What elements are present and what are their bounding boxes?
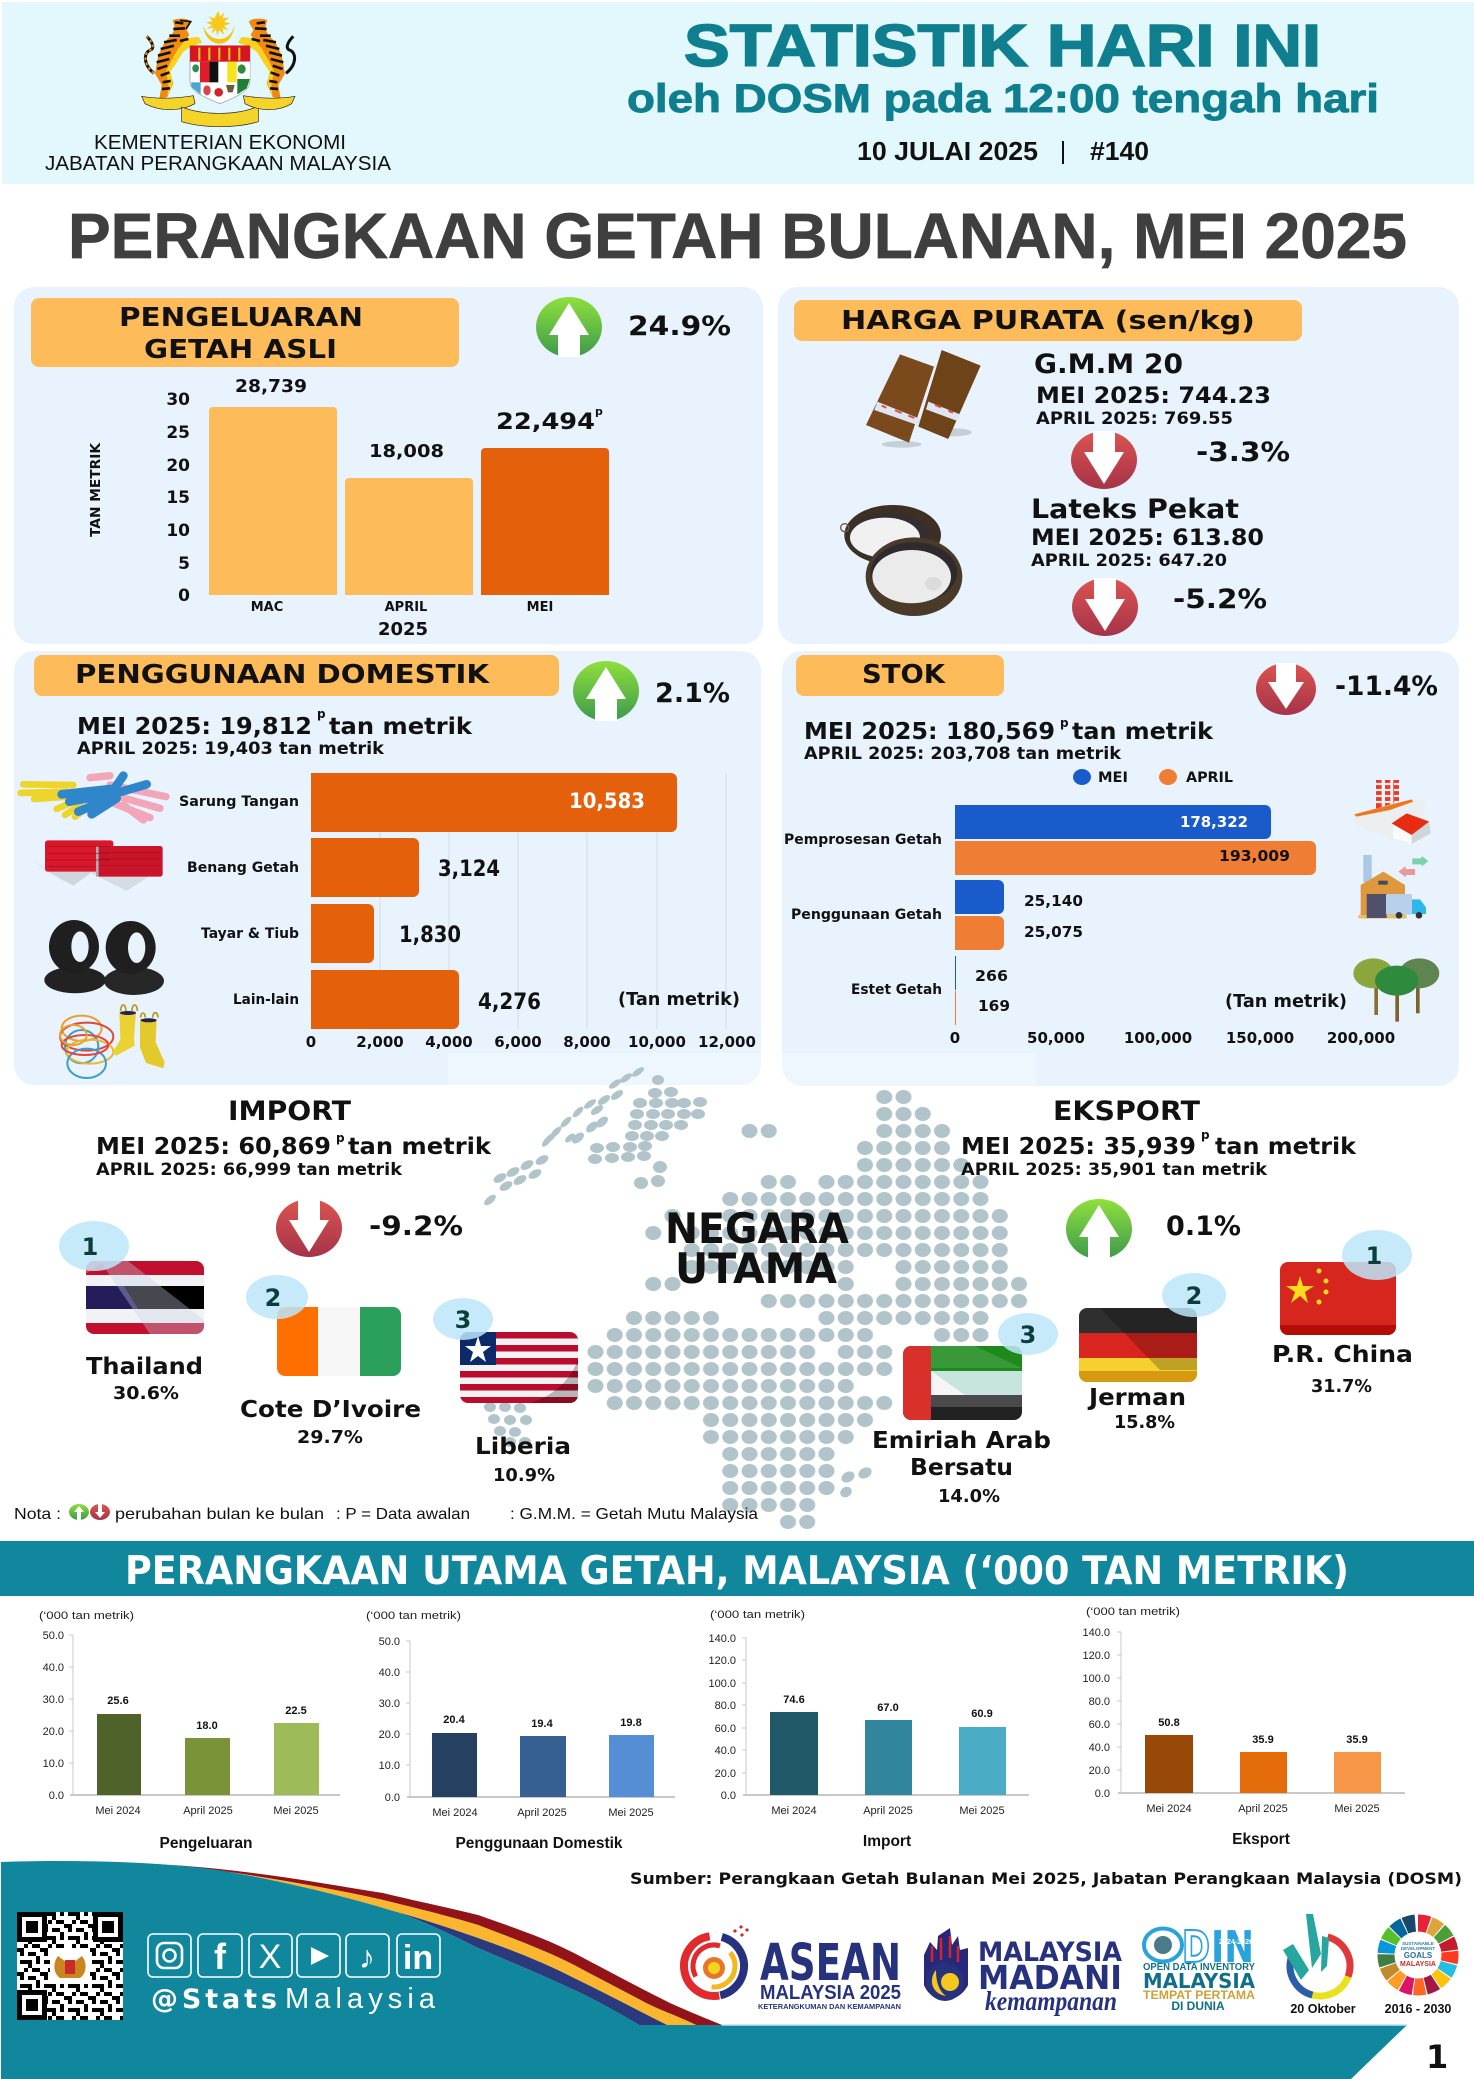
logo: 20 oktober: 20 Oktober bbox=[1290, 2002, 1356, 2016]
chart: import: 67.0 bbox=[877, 1702, 899, 1714]
bar chart: 20 bbox=[166, 456, 190, 476]
bar chart: 28,739 bbox=[235, 376, 307, 397]
chart: pengeluaran: 10.0 bbox=[43, 1758, 64, 1770]
import country: liberia: 10.9% bbox=[493, 1465, 555, 1486]
sdg wheel caption: SUSTAINABLE bbox=[1402, 1941, 1434, 1946]
bar chart: TAN METRIK bbox=[89, 442, 104, 537]
eksport country: jerman: Jerman bbox=[1087, 1385, 1186, 1411]
bar chart bbox=[89, 376, 609, 640]
logo: asean malaysia 2025: KETERANGKUMAN DAN KEMAMPANAN bbox=[758, 2002, 901, 2011]
horizontal bar chart: 2,000 bbox=[356, 1033, 404, 1051]
eksport country: china: 31.7% bbox=[1311, 1376, 1372, 1397]
chart: import: 140.0 bbox=[708, 1633, 736, 1645]
stock figures bbox=[804, 716, 1214, 764]
import country: liberia: Liberia bbox=[475, 1434, 571, 1460]
social icons bbox=[148, 1934, 440, 1977]
panel: stok bbox=[782, 651, 1459, 1086]
logo: open data inventory bbox=[1143, 1922, 1256, 2013]
horizontal bar chart: Tayar & Tiub bbox=[201, 926, 299, 942]
lateks pekat bbox=[1031, 494, 1264, 571]
horizontal bar chart: Sarung Tangan bbox=[179, 794, 299, 810]
chart: import: Import bbox=[863, 1833, 911, 1850]
horizontal bar chart: 10,000 bbox=[628, 1033, 686, 1051]
change value: 24.9% bbox=[628, 311, 731, 342]
chart: import: 80.0 bbox=[715, 1700, 736, 1712]
horizontal bar chart: 12,000 bbox=[698, 1033, 756, 1051]
chart: penggunaan domestik: April 2025 bbox=[517, 1807, 567, 1819]
chart: eksport: (‘000 tan metrik) bbox=[1086, 1606, 1180, 1618]
horizontal bar chart: 10,583 bbox=[569, 789, 645, 813]
bar chart: p bbox=[595, 405, 603, 418]
sdg wheel caption: DEVELOPMENT bbox=[1401, 1946, 1435, 1951]
horizontal bar chart: 3,124 bbox=[438, 857, 500, 882]
usage figures: APRIL 2025: 19,403 tan metrik bbox=[77, 739, 385, 759]
change value: -3.3% bbox=[1196, 437, 1290, 468]
chart: penggunaan domestik: 30.0 bbox=[379, 1698, 400, 1710]
change value: -11.4% bbox=[1335, 671, 1438, 702]
negara utama label: UTAMA bbox=[675, 1244, 837, 1293]
negara utama label: NEGARA bbox=[665, 1204, 849, 1253]
lateks pekat: MEI 2025: 613.80 bbox=[1031, 526, 1264, 551]
icon: up arrow bbox=[536, 297, 602, 357]
chart: eksport bbox=[1082, 1606, 1405, 1848]
eksport country: jerman: 15.8% bbox=[1114, 1412, 1175, 1433]
bar chart: 18,008 bbox=[369, 441, 444, 462]
chart: pengeluaran: 20.0 bbox=[43, 1726, 64, 1738]
eksport figures bbox=[961, 1128, 1357, 1180]
chart: pengeluaran: 0.0 bbox=[49, 1790, 64, 1802]
grouped bar chart: 50,000 bbox=[1027, 1029, 1085, 1047]
chart: import: 20.0 bbox=[715, 1768, 736, 1780]
bar chart: 30 bbox=[166, 390, 190, 410]
negara utama label bbox=[665, 1204, 849, 1293]
chart: import bbox=[708, 1609, 1029, 1850]
chart: pengeluaran: 22.5 bbox=[285, 1705, 307, 1717]
logo: asean malaysia 2025 bbox=[677, 1926, 901, 2011]
note line: : G.M.M. = Getah Mutu Malaysia bbox=[510, 1506, 758, 1523]
grouped bar chart: 193,009 bbox=[1219, 847, 1290, 865]
chart: penggunaan domestik: 40.0 bbox=[379, 1667, 400, 1679]
chart: eksport: 100.0 bbox=[1082, 1673, 1110, 1685]
icon: rubber sheets and latex bowls bbox=[841, 350, 981, 616]
chart: pengeluaran: 40.0 bbox=[43, 1662, 64, 1674]
chart: import: 60.0 bbox=[715, 1723, 736, 1735]
chart: eksport: Eksport bbox=[1232, 1831, 1290, 1848]
chart: import: 60.9 bbox=[971, 1708, 993, 1720]
bar chart: 22,494 bbox=[496, 410, 595, 435]
horizontal bar chart: 4,000 bbox=[425, 1033, 473, 1051]
grouped bar chart: Penggunaan Getah bbox=[791, 907, 942, 923]
eksport country: china: 1 bbox=[1366, 1242, 1382, 1270]
chart: penggunaan domestik: 20.0 bbox=[379, 1729, 400, 1741]
grouped bar chart: Pemprosesan Getah bbox=[784, 832, 942, 848]
chart: pengeluaran: Pengeluaran bbox=[159, 1835, 253, 1852]
icon: x: X bbox=[259, 1938, 281, 1976]
logo: malaysia madani bbox=[924, 1928, 1122, 2016]
eksport country: emiriah arab bersatu: Bersatu bbox=[910, 1455, 1013, 1481]
sdg wheel caption: MALAYSIA bbox=[1400, 1961, 1436, 1968]
chart: import: Mei 2025 bbox=[959, 1805, 1005, 1817]
eksport figures: MEI 2025: 35,939 bbox=[961, 1134, 1196, 1160]
heading: PENGELUARAN bbox=[119, 303, 363, 333]
chart: import: Mei 2024 bbox=[771, 1805, 817, 1817]
horizontal bar chart: (Tan metrik) bbox=[618, 989, 740, 1010]
ministry name: JABATAN PERANGKAAN MALAYSIA bbox=[45, 153, 392, 175]
import change: -9.2% bbox=[369, 1211, 463, 1242]
eksport figures: tan metrik bbox=[1215, 1134, 1357, 1160]
import country: cote d'ivoire: 29.7% bbox=[297, 1427, 363, 1448]
logo: open data inventory: 2024-2026 bbox=[1219, 1939, 1253, 1946]
lateks pekat: APRIL 2025: 647.20 bbox=[1031, 551, 1227, 571]
import country: liberia bbox=[433, 1298, 578, 1486]
icon: tiktok: ♪ bbox=[359, 1939, 375, 1975]
heading: HARGA PURATA (sen/kg) bbox=[841, 306, 1255, 336]
panel: penggunaan domestik bbox=[14, 651, 761, 1085]
import figures: MEI 2025: 60,869 bbox=[96, 1134, 331, 1160]
horizontal bar chart: 1,830 bbox=[399, 923, 461, 948]
chart: penggunaan domestik: Mei 2025 bbox=[608, 1807, 654, 1819]
date and issue bbox=[857, 136, 1149, 166]
chart: penggunaan domestik: 19.8 bbox=[620, 1717, 642, 1729]
eksport country: emiriah arab bersatu: Emiriah Arab bbox=[872, 1428, 1051, 1454]
panel: pengeluaran getah asli bbox=[14, 287, 763, 644]
chart: pengeluaran: April 2025 bbox=[183, 1805, 233, 1817]
logo: malaysia madani: MALAYSIA bbox=[978, 1937, 1122, 1968]
import figures: APRIL 2025: 66,999 tan metrik bbox=[96, 1160, 403, 1180]
horizontal bar chart: 6,000 bbox=[494, 1033, 542, 1051]
bar chart: APRIL bbox=[385, 600, 427, 615]
chart: pengeluaran: (‘000 tan metrik) bbox=[39, 1610, 134, 1622]
logo: open data inventory: DI DUNIA bbox=[1171, 1999, 1225, 2013]
horizontal bar chart: 8,000 bbox=[563, 1033, 611, 1051]
logo: open data inventory: MALAYSIA bbox=[1143, 1969, 1256, 1993]
heading bbox=[796, 655, 1004, 696]
grouped bar chart: 25,075 bbox=[1024, 923, 1083, 941]
bar chart: MAC bbox=[251, 600, 283, 615]
chart: penggunaan domestik: 0.0 bbox=[385, 1792, 400, 1804]
logo: malaysia madani: kemampanan bbox=[985, 1986, 1117, 2016]
import figures: p bbox=[336, 1131, 345, 1145]
section banner: PERANGKAAN UTAMA GETAH, MALAYSIA (‘000 TAN METRIK) bbox=[125, 1549, 1349, 1594]
usage figures: MEI 2025: 19,812 bbox=[77, 714, 312, 740]
usage figures bbox=[77, 707, 473, 759]
date and issue: 10 JULAI 2025 bbox=[857, 136, 1038, 166]
chart: eksport: 20.0 bbox=[1089, 1765, 1110, 1777]
handle: @Stats bbox=[151, 1984, 277, 2015]
import country: cote d'ivoire: 2 bbox=[265, 1284, 281, 1312]
chart: penggunaan domestik bbox=[366, 1610, 675, 1852]
chart: penggunaan domestik: Penggunaan Domestik bbox=[455, 1835, 623, 1852]
horizontal bar chart: Benang Getah bbox=[187, 860, 299, 876]
chart: import: April 2025 bbox=[863, 1805, 913, 1817]
icon: gloves, thread spools, tyres, rubber bands and boots bbox=[21, 776, 166, 1078]
grouped bar chart: 150,000 bbox=[1226, 1029, 1294, 1047]
horizontal bar chart bbox=[179, 773, 756, 1051]
icon: down arrow bbox=[1072, 578, 1138, 636]
icon: linkedin: in bbox=[403, 1939, 433, 1977]
sdg wheel caption bbox=[1385, 1941, 1451, 2016]
logo: open data inventory: TEMPAT PERTAMA bbox=[1143, 1988, 1255, 2002]
import figures: tan metrik bbox=[348, 1134, 492, 1160]
bar chart: MEI bbox=[527, 600, 553, 615]
chart: import: 100.0 bbox=[708, 1678, 736, 1690]
chart: import: (‘000 tan metrik) bbox=[710, 1609, 805, 1621]
brand title: STATISTIK HARI INI bbox=[684, 13, 1321, 79]
grouped bar chart: Estet Getah bbox=[851, 982, 942, 998]
chart: eksport: Mei 2024 bbox=[1146, 1803, 1192, 1815]
grouped bar chart: 178,322 bbox=[1180, 813, 1248, 831]
icon: instagram bbox=[157, 1943, 182, 1968]
legend: MEI bbox=[1098, 770, 1128, 786]
chart: eksport: 40.0 bbox=[1089, 1742, 1110, 1754]
note line: : P = Data awalan bbox=[336, 1506, 470, 1523]
eksport figures: p bbox=[1201, 1128, 1210, 1142]
page number: 1 bbox=[1426, 2038, 1448, 2076]
legend: APRIL bbox=[1186, 770, 1233, 786]
icon: facebook: f bbox=[214, 1936, 227, 1977]
stock figures: tan metrik bbox=[1072, 719, 1214, 745]
grouped bar chart: (Tan metrik) bbox=[1225, 991, 1347, 1012]
chart: import: 0.0 bbox=[721, 1790, 736, 1802]
stock figures: p bbox=[1060, 716, 1069, 730]
grouped bar chart: 200,000 bbox=[1327, 1029, 1395, 1047]
chart: import: 74.6 bbox=[783, 1694, 805, 1706]
chart: eksport: April 2025 bbox=[1238, 1803, 1288, 1815]
GMM 20: APRIL 2025: 769.55 bbox=[1036, 409, 1233, 429]
icon: coat of arms bbox=[142, 11, 295, 127]
logo: open data inventory: D bbox=[1182, 1922, 1210, 1973]
logo: asean malaysia 2025: MALAYSIA 2025 bbox=[760, 1982, 901, 2004]
grouped bar chart: 25,140 bbox=[1024, 892, 1083, 910]
icon: dotted world map bbox=[448, 1053, 1036, 1530]
heading bbox=[794, 300, 1302, 341]
chart: penggunaan domestik: 19.4 bbox=[531, 1718, 554, 1730]
grouped bar chart: 0 bbox=[950, 1029, 960, 1047]
header band bbox=[2, 2, 1474, 184]
chart: eksport: 50.8 bbox=[1158, 1717, 1180, 1729]
horizontal bar chart: 4,276 bbox=[478, 990, 541, 1015]
icon: import down arrow bbox=[276, 1199, 342, 1257]
chart: eksport: 0.0 bbox=[1095, 1788, 1110, 1800]
grouped bar chart bbox=[784, 805, 1395, 1047]
chart: eksport: 140.0 bbox=[1082, 1627, 1110, 1639]
logo: open data inventory: OPEN DATA INVENTORY bbox=[1143, 1961, 1255, 1973]
import heading: IMPORT bbox=[228, 1096, 352, 1127]
lateks pekat: Lateks Pekat bbox=[1031, 494, 1239, 525]
stock figures: APRIL 2025: 203,708 tan metrik bbox=[804, 744, 1122, 764]
icon: down arrow bbox=[1071, 431, 1137, 489]
chart: pengeluaran: 18.0 bbox=[196, 1720, 218, 1732]
panel: harga purata bbox=[778, 287, 1459, 644]
eksport country: emiriah arab bersatu: 3 bbox=[1020, 1321, 1036, 1349]
chart: eksport: 60.0 bbox=[1089, 1719, 1110, 1731]
chart: pengeluaran: 30.0 bbox=[43, 1694, 64, 1706]
chart: penggunaan domestik: 20.4 bbox=[443, 1714, 466, 1726]
heading: GETAH ASLI bbox=[144, 335, 337, 365]
import country: thailand: 1 bbox=[82, 1233, 98, 1261]
ministry name: KEMENTERIAN EKONOMI bbox=[94, 132, 346, 154]
source line: Sumber: Perangkaan Getah Bulanan Mei 2025, Jabatan Perangkaan Malaysia (DOSM) bbox=[630, 1869, 1462, 1888]
horizontal bar chart: Lain-lain bbox=[233, 992, 299, 1008]
heading bbox=[34, 655, 559, 696]
icon: play bbox=[311, 1947, 329, 1965]
GMM 20: G.M.M 20 bbox=[1034, 349, 1183, 380]
brand title: oleh DOSM pada 12:00 tengah hari bbox=[627, 77, 1379, 121]
chart: eksport: 80.0 bbox=[1089, 1696, 1110, 1708]
sdg wheel caption: 2016 - 2030 bbox=[1385, 2002, 1451, 2016]
note line: Nota : bbox=[14, 1506, 61, 1523]
date and issue: #140 bbox=[1090, 136, 1149, 166]
eksport country: emiriah arab bersatu bbox=[872, 1313, 1058, 1507]
chart: import: 120.0 bbox=[708, 1655, 736, 1667]
bar chart: 5 bbox=[178, 554, 190, 574]
change value: 2.1% bbox=[655, 678, 730, 709]
eksport country: china: P.R. China bbox=[1272, 1342, 1413, 1368]
chart: eksport: 120.0 bbox=[1082, 1650, 1110, 1662]
note line: perubahan bulan ke bulan bbox=[115, 1506, 324, 1523]
chart: eksport: 35.9 bbox=[1252, 1734, 1274, 1746]
chart: pengeluaran: 25.6 bbox=[107, 1695, 129, 1707]
chart: penggunaan domestik: Mei 2024 bbox=[432, 1807, 478, 1819]
chart: pengeluaran: Mei 2025 bbox=[273, 1805, 319, 1817]
logo: asean malaysia 2025: ASEAN bbox=[760, 1934, 901, 1993]
icon: down arrow bbox=[1256, 663, 1316, 715]
icon: QR code bbox=[17, 1912, 123, 2020]
usage figures: tan metrik bbox=[329, 714, 473, 740]
bar chart: 10 bbox=[166, 521, 190, 541]
handle bbox=[151, 1983, 436, 2015]
heading: STOK bbox=[862, 660, 946, 690]
GMM 20: MEI 2025: 744.23 bbox=[1036, 384, 1271, 409]
heading bbox=[31, 298, 459, 367]
grouped bar chart: 169 bbox=[978, 997, 1010, 1015]
eksport heading: EKSPORT bbox=[1053, 1096, 1201, 1127]
usage figures: p bbox=[317, 707, 326, 721]
footer band bbox=[1, 1861, 1407, 2079]
logo: open data inventory: IN bbox=[1211, 1922, 1254, 1973]
icon: eksport up arrow bbox=[1066, 1199, 1132, 1259]
logo: sustainable development goals wheel bbox=[1373, 1910, 1463, 2000]
chart: import: 40.0 bbox=[715, 1745, 736, 1757]
import country: liberia: 3 bbox=[455, 1306, 471, 1334]
chart: pengeluaran: 50.0 bbox=[43, 1630, 64, 1642]
note line bbox=[14, 1504, 758, 1523]
chart: pengeluaran bbox=[39, 1610, 340, 1852]
horizontal bar chart: 0 bbox=[306, 1033, 316, 1051]
change value: -5.2% bbox=[1173, 584, 1267, 615]
import country: thailand: 30.6% bbox=[113, 1383, 179, 1404]
ministry name bbox=[45, 132, 392, 175]
bar chart: 15 bbox=[166, 488, 190, 508]
chart: penggunaan domestik: 50.0 bbox=[379, 1636, 400, 1648]
brand title bbox=[627, 13, 1379, 121]
handle: Malaysia bbox=[285, 1983, 436, 2015]
bar chart: 0 bbox=[178, 586, 190, 606]
main title: PERANGKAAN GETAH BULANAN, MEI 2025 bbox=[68, 200, 1407, 272]
import country: cote d'ivoire bbox=[240, 1275, 421, 1448]
bar chart: 25 bbox=[166, 423, 190, 443]
grouped bar chart: 266 bbox=[975, 967, 1008, 985]
stock figures: MEI 2025: 180,569 bbox=[804, 719, 1055, 745]
import country: thailand bbox=[59, 1221, 204, 1404]
heading: PENGGUNAAN DOMESTIK bbox=[75, 660, 490, 690]
legend bbox=[1073, 769, 1233, 786]
eksport change: 0.1% bbox=[1166, 1211, 1241, 1242]
eksport country: emiriah arab bersatu: 14.0% bbox=[938, 1486, 1000, 1507]
chart: penggunaan domestik: (‘000 tan metrik) bbox=[366, 1610, 461, 1622]
chart: penggunaan domestik: 10.0 bbox=[379, 1760, 400, 1772]
icon: up arrow bbox=[573, 661, 639, 721]
chart: eksport: 35.9 bbox=[1346, 1734, 1368, 1746]
grouped bar chart: 100,000 bbox=[1124, 1029, 1192, 1047]
import country: thailand: Thailand bbox=[86, 1354, 203, 1380]
import figures bbox=[96, 1131, 492, 1180]
bar chart: 2025 bbox=[378, 619, 428, 640]
sdg wheel caption: GOALS bbox=[1404, 1951, 1433, 1960]
import country: cote d'ivoire: Cote D’Ivoire bbox=[240, 1397, 421, 1423]
icon: factory, warehouse and trees bbox=[1353, 780, 1439, 1022]
logo: malaysia madani: MADANI bbox=[978, 1958, 1122, 1997]
eksport country: jerman: 2 bbox=[1186, 1282, 1202, 1310]
chart: pengeluaran: Mei 2024 bbox=[95, 1805, 141, 1817]
logo: 20 oktober bbox=[1282, 1914, 1358, 2016]
eksport country: jerman bbox=[1079, 1273, 1226, 1433]
GMM 20 bbox=[1034, 349, 1271, 429]
eksport country: china bbox=[1272, 1230, 1413, 1397]
chart: eksport: Mei 2025 bbox=[1334, 1803, 1380, 1815]
eksport figures: APRIL 2025: 35,901 tan metrik bbox=[961, 1160, 1268, 1180]
